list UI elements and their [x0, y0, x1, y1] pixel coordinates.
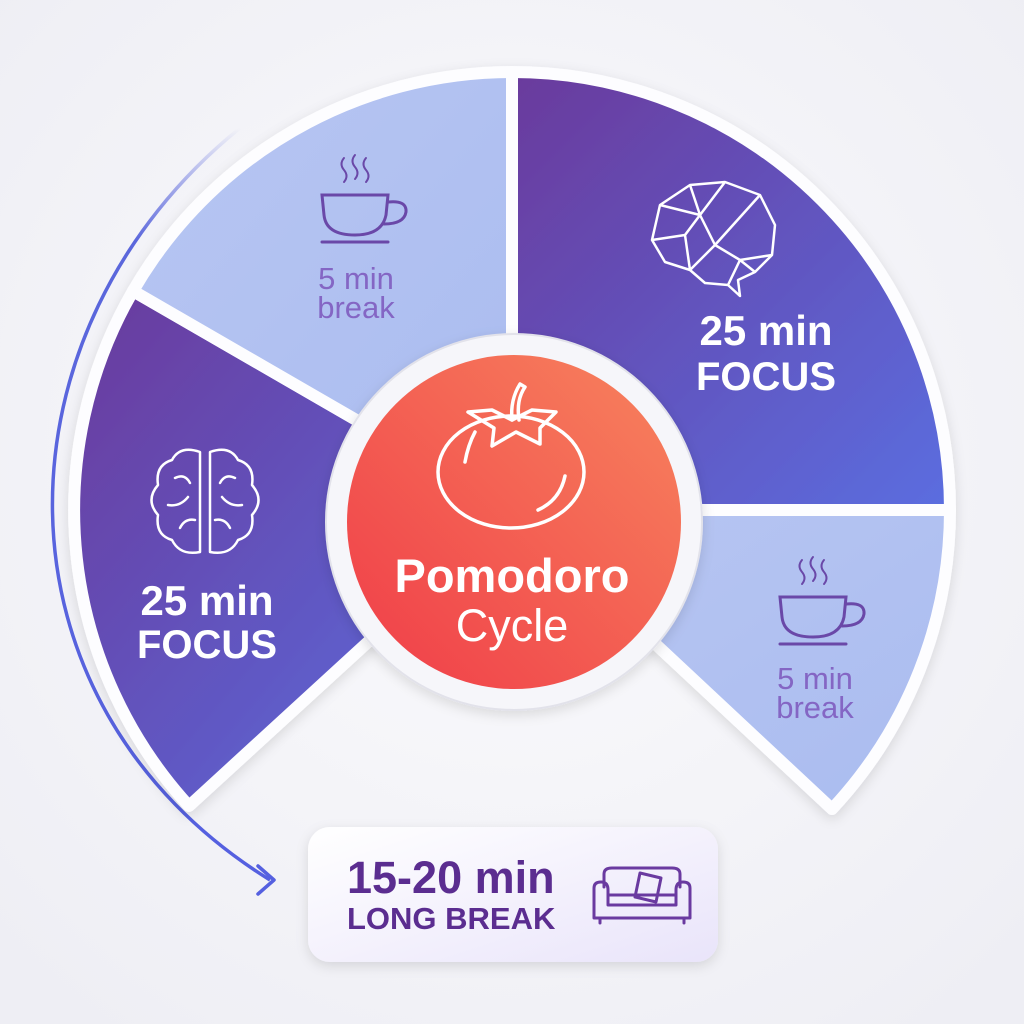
- wheel segments: [74, 72, 950, 809]
- text: break: [776, 690, 854, 725]
- center circle: Pomodoro Cycle: Pomodoro: [395, 549, 629, 602]
- callout: long break box: LONG BREAK: [347, 901, 556, 936]
- callout: long break box: [308, 827, 718, 962]
- text: 25 min focus left: 25 min: [140, 577, 274, 624]
- center circle: Pomodoro Cycle: [347, 355, 681, 689]
- text: FOCUS: [696, 355, 836, 399]
- center ring: [326, 334, 702, 710]
- text: FOCUS: [137, 623, 277, 667]
- segment: left focus: [74, 291, 512, 806]
- icon: polygon brain right: [652, 182, 775, 296]
- segment: top-left break: [133, 72, 512, 510]
- text: 5 min break right: 5 min: [777, 661, 853, 696]
- segment: top-right focus: [512, 72, 950, 510]
- icon: cup top-left: [322, 155, 406, 242]
- text: break: [317, 290, 395, 325]
- text: 25 min focus right: 25 min: [699, 307, 833, 354]
- icon: cup right: [780, 557, 864, 644]
- callout: long break box: 15-20 min: [347, 852, 555, 903]
- icon: tomato: [438, 384, 584, 528]
- text: 5 min break top: 5 min: [318, 261, 394, 296]
- segment: bottom-right break: [512, 510, 950, 809]
- icon: sofa: [594, 868, 690, 923]
- center circle: Pomodoro Cycle: Cycle: [456, 600, 568, 651]
- icon: brain left: [152, 450, 258, 553]
- arrow: cycle to long break: [52, 128, 274, 894]
